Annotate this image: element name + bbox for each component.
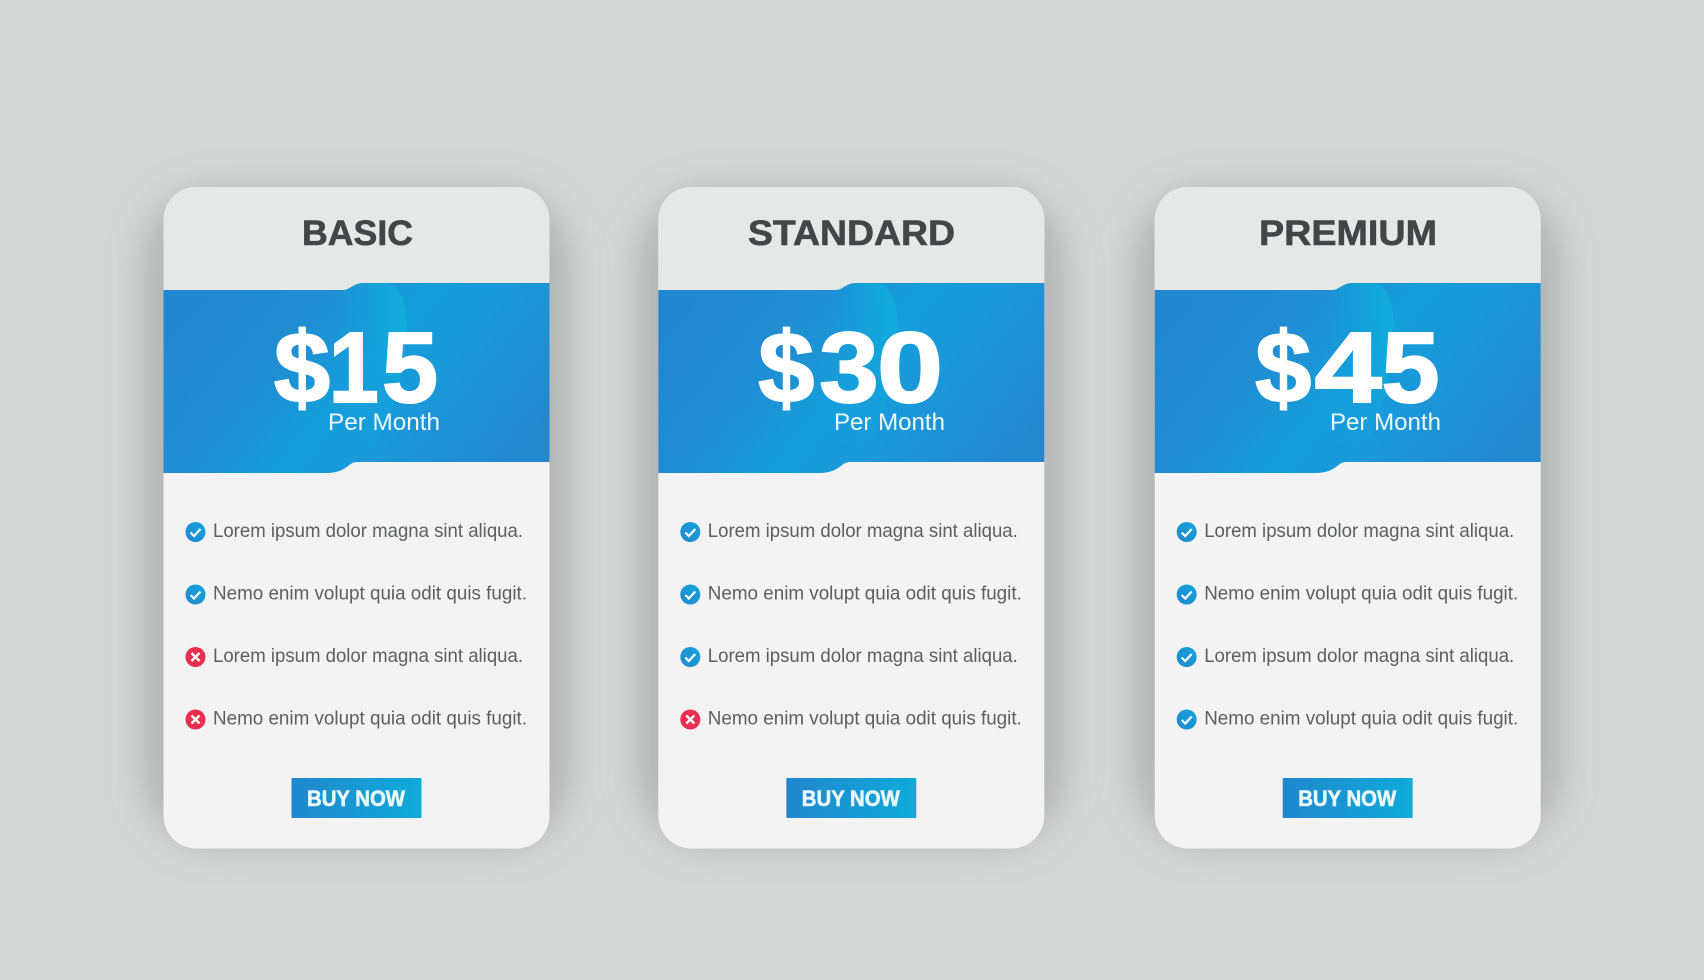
icon: cross [186,710,206,730]
price [758,312,943,424]
card body [164,187,550,848]
price period: Per Month [834,409,945,436]
buy button: BUY NOW [307,786,405,811]
band highlight [776,283,897,473]
price period: Per Month [1330,409,1441,436]
card shadow [144,190,570,845]
icon: cross [680,710,700,730]
feature text: Nemo enim volupt quia odit quis fugit. [1204,582,1518,604]
buy button [1283,778,1413,818]
buy button: BUY NOW [802,786,900,811]
icon: check [680,584,700,604]
card body [658,187,1044,848]
card body [1155,187,1541,848]
panel: standard plan [638,187,1064,848]
feature text: Lorem ipsum dolor magna sint aliqua. [1204,645,1514,667]
feature text: Nemo enim volupt quia odit quis fugit. [708,582,1022,604]
price period: Per Month [328,409,440,436]
icon: check [680,522,700,542]
buy button: BUY NOW [1298,786,1396,811]
heading: BASIC [302,214,413,253]
card header background [658,187,1044,295]
icon: check [186,522,206,542]
price: 3 [819,312,879,424]
heading: STANDARD [748,214,955,253]
panel: premium plan [1135,187,1561,848]
heading: PREMIUM [1259,214,1437,253]
price: 5 [1381,312,1439,424]
feature text: Lorem ipsum dolor magna sint aliqua. [708,520,1018,542]
price: 1 [329,312,379,424]
icon: check [1177,522,1197,542]
feature list [1177,520,1518,730]
feature text: Nemo enim volupt quia odit quis fugit. [708,708,1022,730]
price: 0 [877,312,943,424]
feature text: Lorem ipsum dolor magna sint aliqua. [708,645,1018,667]
price: 5 [382,312,438,424]
icon: check [186,584,206,604]
price [274,312,438,424]
feature text: Nemo enim volupt quia odit quis fugit. [213,582,527,604]
band highlight [284,283,406,473]
card header background [1155,187,1541,295]
price: $ [1255,312,1311,424]
buy button [292,778,422,818]
feature text: Nemo enim volupt quia odit quis fugit. [1204,708,1518,730]
card shadow [638,190,1064,845]
icon: check [1177,710,1197,730]
feature text: Nemo enim volupt quia odit quis fugit. [213,708,527,730]
price: $ [758,312,814,424]
icon: cross [186,647,206,667]
feature text: Lorem ipsum dolor magna sint aliqua. [213,645,523,667]
band highlight [1273,283,1394,473]
panel: basic plan [144,187,570,848]
price band [164,283,550,473]
icon: check [1177,647,1197,667]
price band [1155,283,1541,473]
icon: check [1177,584,1197,604]
price: 4 [1315,312,1382,424]
card header background [164,187,550,295]
feature text: Lorem ipsum dolor magna sint aliqua. [213,520,523,542]
feature text: Lorem ipsum dolor magna sint aliqua. [1204,520,1514,542]
price: $ [274,312,330,424]
feature list [680,520,1022,730]
price [1255,312,1440,424]
card shadow [1135,190,1561,845]
buy button [786,778,916,818]
icon: check [680,647,700,667]
feature list [186,520,527,730]
price band [658,283,1044,473]
